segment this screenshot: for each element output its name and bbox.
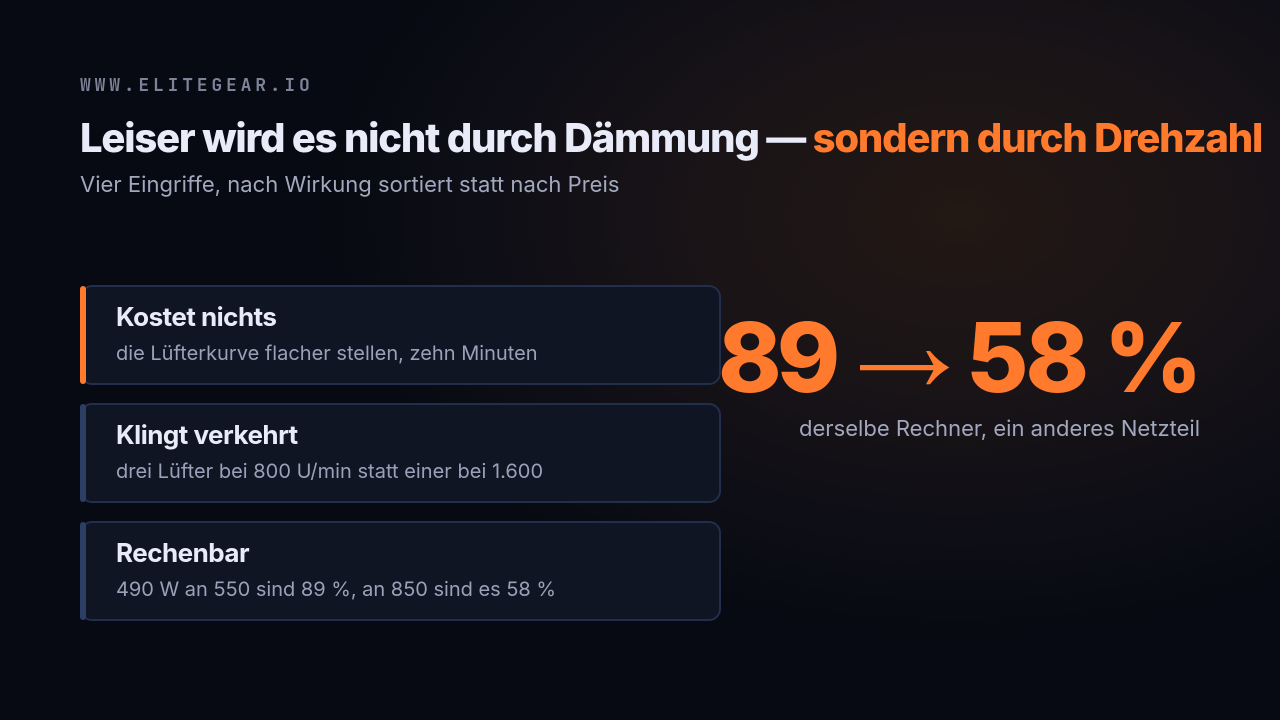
card 1 text: die Lüfterkurve flacher stellen, zehn Minuten: [116, 341, 538, 365]
panel: card 3: [80, 521, 721, 621]
card 3 text: 490 W an 550 sind 89 %, an 850 sind es 58 %: [116, 577, 556, 601]
card 3 accent bar: [80, 522, 86, 620]
panel: card 1: [80, 285, 721, 385]
icon: arrow: [860, 351, 950, 384]
card 2 text: drei Lüfter bei 800 U/min statt einer bei 1.600: [116, 459, 543, 483]
card 2 accent bar: [80, 404, 86, 502]
card 1 heading: Kostet nichts: [116, 302, 276, 333]
title: Leiser wird es nicht durch Dämmung — sondern durch Drehzahl: [80, 113, 1262, 162]
subtitle: Vier Eingriffe, nach Wirkung sortiert statt nach Preis: [80, 172, 619, 198]
card 2 heading: Klingt verkehrt: [116, 420, 298, 451]
stat: before value: 89: [718, 300, 835, 416]
card 3 heading: Rechenbar: [116, 538, 249, 569]
card 1 accent bar: [80, 286, 86, 384]
panel: card 2: [80, 403, 721, 503]
stat caption: derselbe Rechner, ein anderes Netzteil: [799, 416, 1200, 442]
big stat: [718, 300, 1199, 416]
eyebrow: site address: WWW.ELITEGEAR.IO: [80, 74, 314, 97]
stat: after value: 58 %: [966, 300, 1199, 416]
